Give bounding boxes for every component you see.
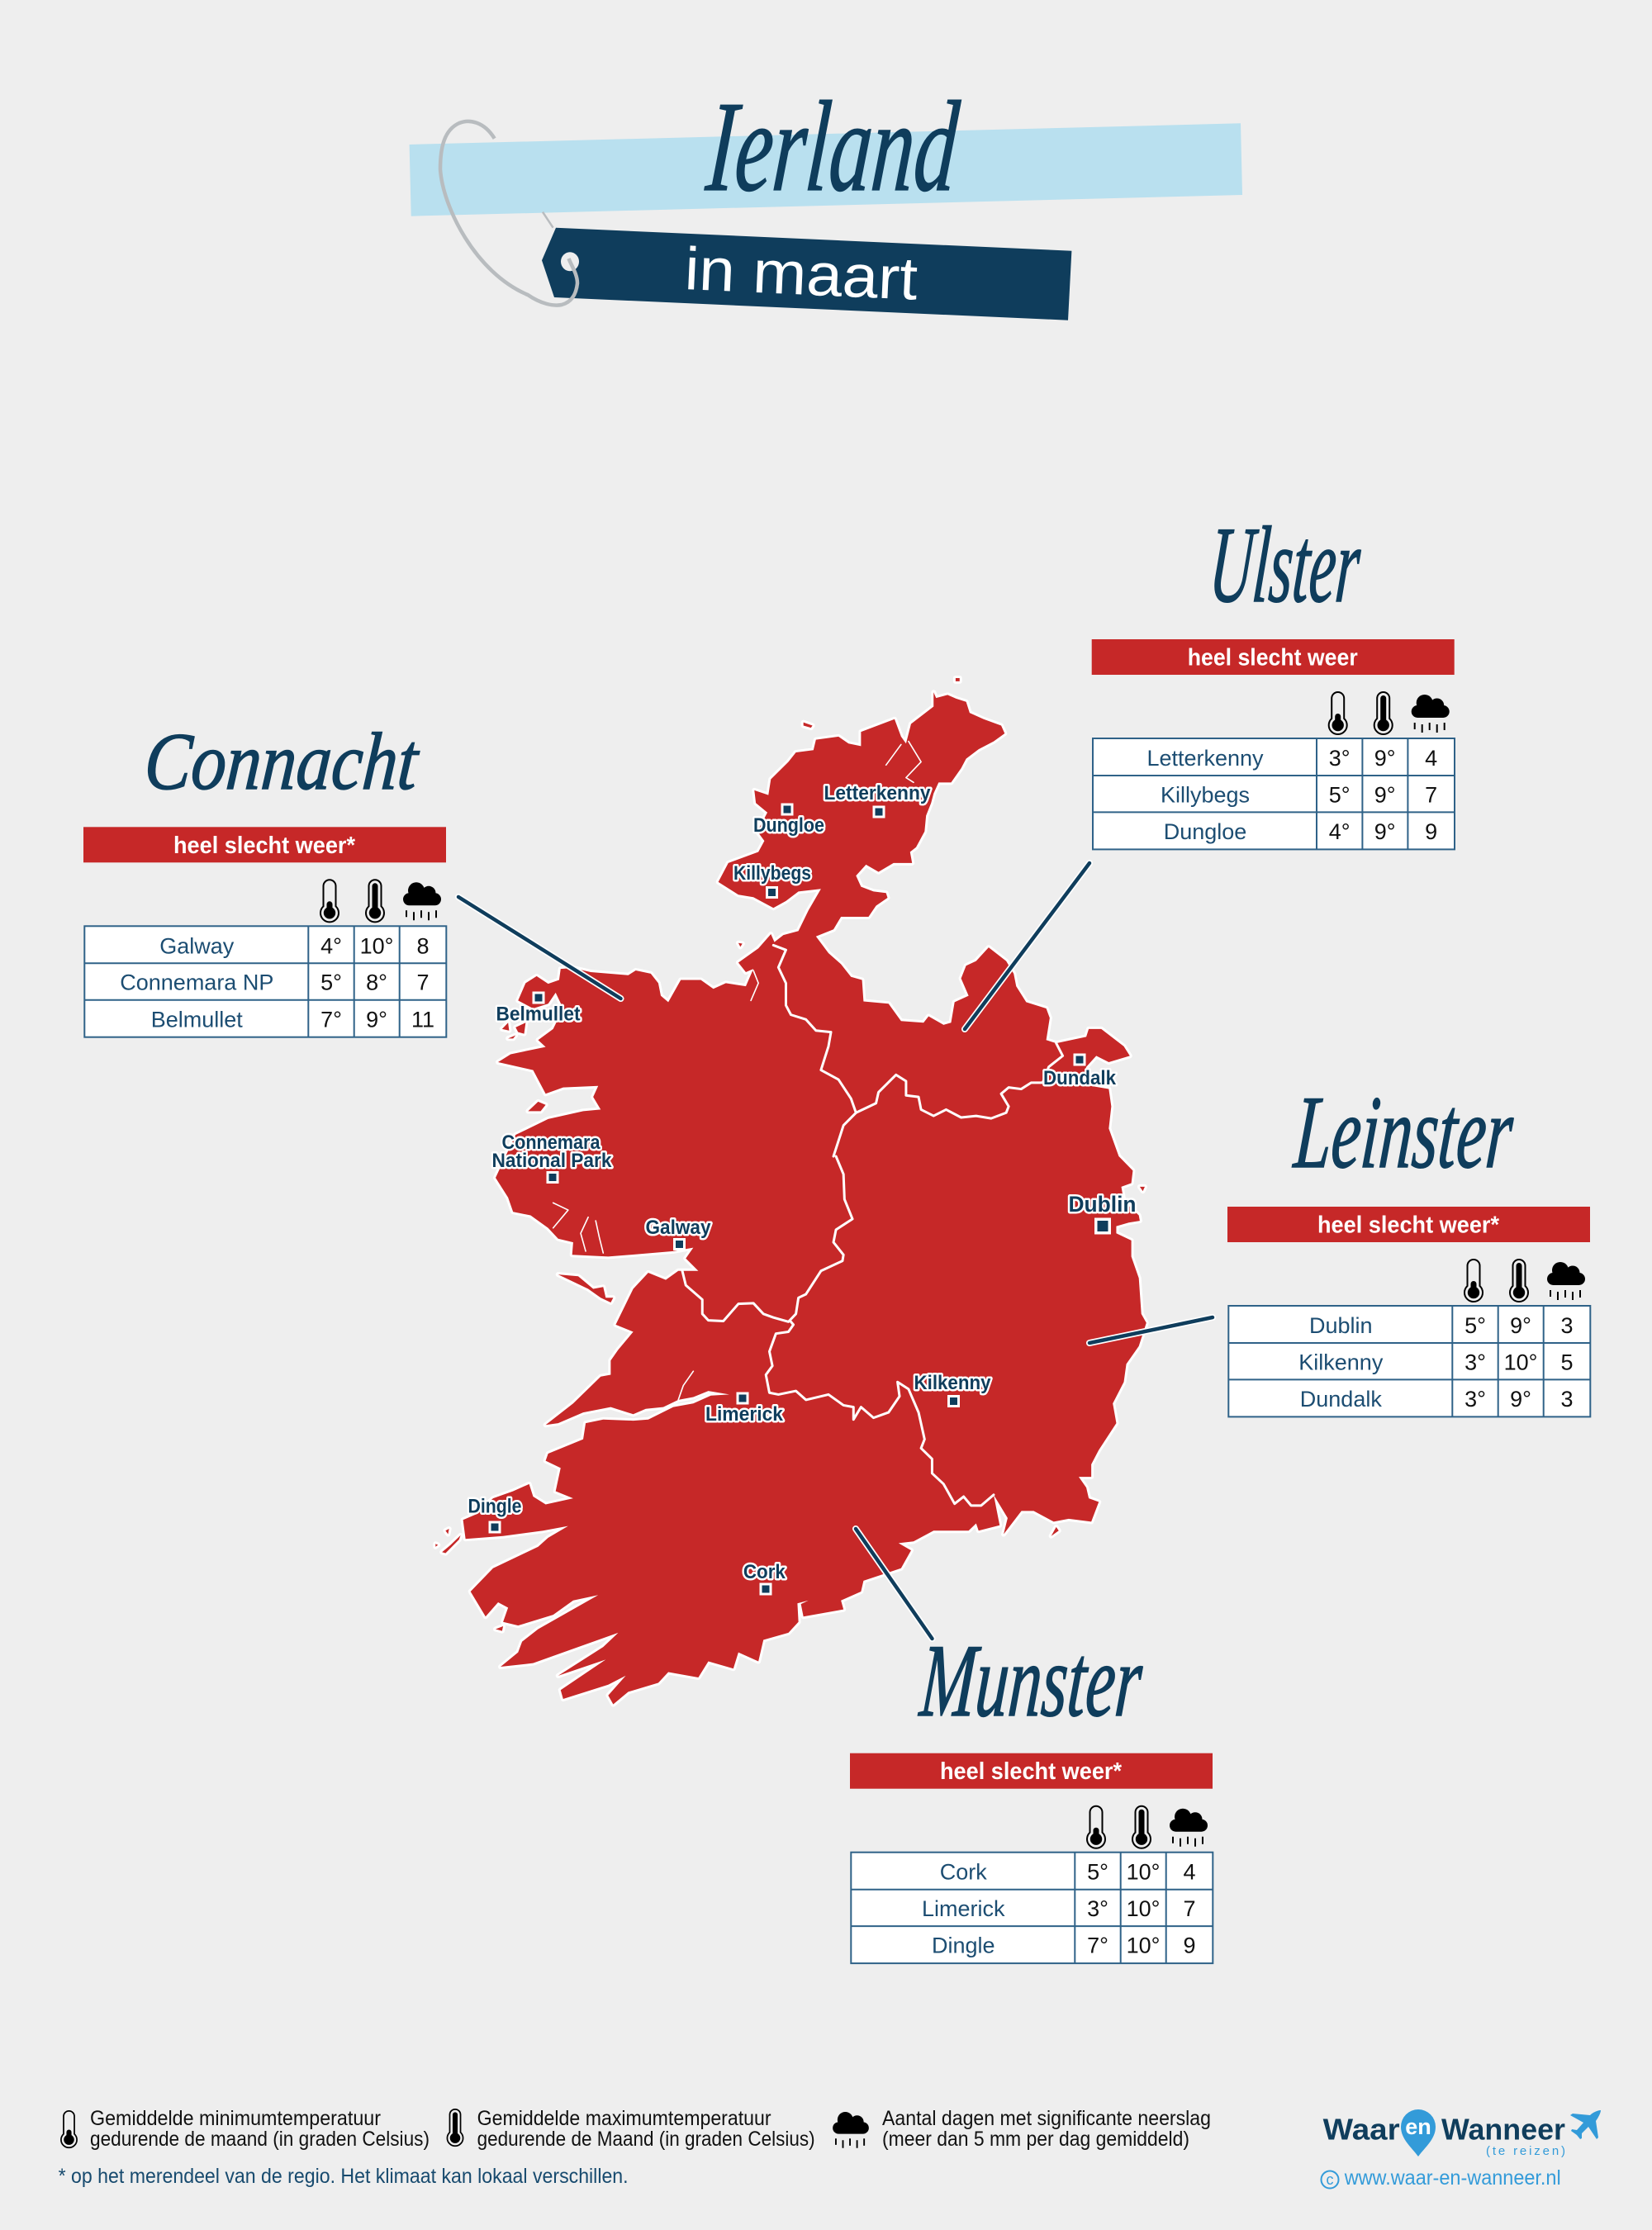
weather verdict bar [83,827,446,862]
data table: Kilkenny [1298,1350,1384,1374]
city: Letterkenny: Letterkenny [824,782,931,804]
panel: Ulster [1092,505,1455,849]
title block [410,75,1242,320]
column icons [1087,1806,1208,1848]
weather table: Leinster [1227,1207,1590,1416]
data table: 9 [1425,819,1437,844]
city: Limerick: Limerick [705,1403,784,1426]
city: Dundalk: Dundalk [1043,1067,1117,1089]
data table: 3° [1087,1896,1108,1921]
city: Connemara National Park: National Park [492,1150,612,1172]
data table: Dungloe [1164,819,1246,844]
city: Killybegs [733,862,811,899]
weather verdict bar: heel slecht weer [1188,644,1358,671]
data table: Limerick [922,1896,1005,1921]
legend: maximum temperature: gedurende de Maand (in graden Celsius) [477,2128,815,2151]
city: Dundalk [1043,1054,1117,1089]
land south [435,1156,1146,1705]
city: Dungloe [753,803,824,837]
data table: 9° [366,1007,387,1032]
legend: minimum temperature [61,2107,430,2151]
city: Killybegs: Killybegs [733,862,811,885]
data table: 9° [1510,1313,1531,1338]
weather verdict bar [1227,1207,1590,1242]
data table: 5° [1329,782,1351,807]
city: Kilkenny [914,1372,991,1407]
luggage tag [542,228,1071,320]
data table: 7° [1087,1933,1108,1958]
icon: airplane [1570,2110,1601,2139]
data table [851,1853,1213,1963]
heading: Leinster: Leinster [1290,1075,1517,1190]
data table: 9° [1374,819,1396,844]
data table: 7 [1183,1896,1196,1921]
data table: 8° [366,970,387,995]
luggage tag cord [543,212,553,228]
map of Ireland [435,678,1146,1705]
tag hole [561,252,579,271]
data table: 10° [1127,1933,1160,1958]
legend: maximum temperature [447,2107,815,2151]
subtitle: in maart: in maart [683,235,919,313]
data table: 4 [1183,1860,1196,1885]
city: Belmullet: Belmullet [496,1003,580,1026]
data table: 5° [320,970,342,995]
leader line: Connacht [458,897,621,999]
leader line: Leinster [1089,1317,1213,1343]
copyright and website: c [1327,2171,1333,2188]
city: Connemara National Park [492,1132,612,1184]
column icons [320,880,441,922]
data table [1093,738,1455,849]
legend: minimum temperature: Gemiddelde minimumtemperatuur [90,2107,381,2130]
legend [61,2107,1211,2151]
data table: 4° [320,933,342,958]
city: Dingle [468,1495,522,1533]
city: Connemara National Park: Connemara [502,1132,601,1154]
icon: location pin [1401,2109,1436,2156]
data table: 11 [411,1007,434,1032]
weather table: Connacht [83,827,446,1037]
data table: 10° [360,933,393,958]
data table: Cork [940,1860,987,1885]
legend: maximum temperature: Gemiddelde maximumtemperatuur [477,2107,771,2130]
city: Galway: Galway [646,1217,711,1239]
panel: Munster [850,1623,1213,1963]
data table [1228,1306,1590,1416]
weather table: Munster [850,1753,1213,1963]
leader line: Munster [856,1529,932,1639]
city labels [468,782,1137,1596]
data table: 5° [1464,1313,1486,1338]
data table: 9° [1374,746,1396,771]
data table: 7° [320,1007,342,1032]
data table: 10° [1504,1350,1537,1374]
weather verdict bar [1092,639,1455,675]
weather verdict bar [850,1753,1213,1789]
city: Belmullet [496,991,580,1026]
coast halo south [435,1156,1146,1705]
data table: 3° [1464,1350,1486,1374]
data table: 5 [1560,1350,1574,1374]
data table: Dublin [1309,1313,1373,1338]
data table: 10° [1127,1860,1160,1885]
weather table: Ulster [1092,639,1455,849]
heading: Munster: Munster [916,1623,1146,1739]
city: Dublin: Dublin [1069,1192,1137,1217]
data table: 8 [416,933,430,958]
data table: 9° [1374,782,1396,807]
data table: 10° [1127,1896,1160,1921]
data table: Belmullet [151,1007,243,1032]
legend: precipitation [833,2107,1211,2151]
legend: precipitation: Aantal dagen met significante neerslag [882,2107,1211,2130]
column icons [1329,692,1450,734]
city: Dingle: Dingle [468,1495,522,1518]
data table: Letterkenny [1146,746,1264,771]
data table: 3° [1329,746,1351,771]
logo word: Wanneer: Wanneer [1441,2113,1565,2147]
data table: Dundalk [1300,1387,1382,1412]
coast halo north [498,678,1130,1156]
city: Cork [743,1561,786,1596]
city: Limerick [705,1393,784,1426]
province borders south [553,1156,994,1506]
logo tagline: (te reizen) [1486,2144,1565,2158]
data table: 7 [1425,782,1437,807]
data table: Galway [159,933,235,958]
weather verdict bar: heel slecht weer* [1317,1212,1500,1239]
logo word: Waar: Waar [1323,2113,1400,2147]
data table: Killybegs [1161,782,1250,807]
data table: 9° [1510,1387,1531,1412]
leader line: Ulster [965,863,1089,1029]
data table: Dingle [932,1933,995,1958]
data table: 3° [1464,1387,1486,1412]
footnote: * op het merendeel van de regio. Het klimaat kan lokaal verschillen. [59,2165,629,2188]
city: Letterkenny [824,782,931,818]
logo word: en: en [1405,2114,1431,2139]
data table: 4 [1425,746,1437,771]
cord loop [440,121,577,306]
panel: Leinster [1227,1075,1590,1416]
land north [498,678,1130,1156]
copyright and website: www.waar-en-wanneer.nl [1344,2166,1561,2190]
data table: 7 [416,970,430,995]
data table: 3 [1560,1313,1574,1338]
logo [1322,2109,1601,2190]
city: Dungloe: Dungloe [753,814,824,837]
legend: minimum temperature: gedurende de maand (in graden Celsius) [90,2128,430,2151]
city: Galway [646,1217,711,1250]
city: Cork: Cork [743,1561,786,1583]
weather verdict bar: heel slecht weer* [173,833,356,859]
data table: 5° [1087,1860,1108,1885]
heading: Ulster: Ulster [1206,505,1365,625]
data table [84,926,446,1037]
panel: Connacht [83,717,446,1037]
data table: 9 [1183,1933,1196,1958]
data table: 4° [1329,819,1351,844]
data table: 3 [1560,1387,1574,1412]
column icons [1464,1260,1585,1302]
city: Kilkenny: Kilkenny [914,1372,991,1394]
weather verdict bar: heel slecht weer* [940,1758,1123,1785]
province borders north [751,742,1063,1156]
title band [410,123,1242,216]
legend: precipitation: (meer dan 5 mm per dag gemiddeld) [882,2128,1189,2151]
city: Dublin [1069,1192,1137,1234]
data table: Connemara NP [120,970,273,995]
heading: Connacht: Connacht [141,717,423,807]
title: Ierland: Ierland [702,75,963,219]
